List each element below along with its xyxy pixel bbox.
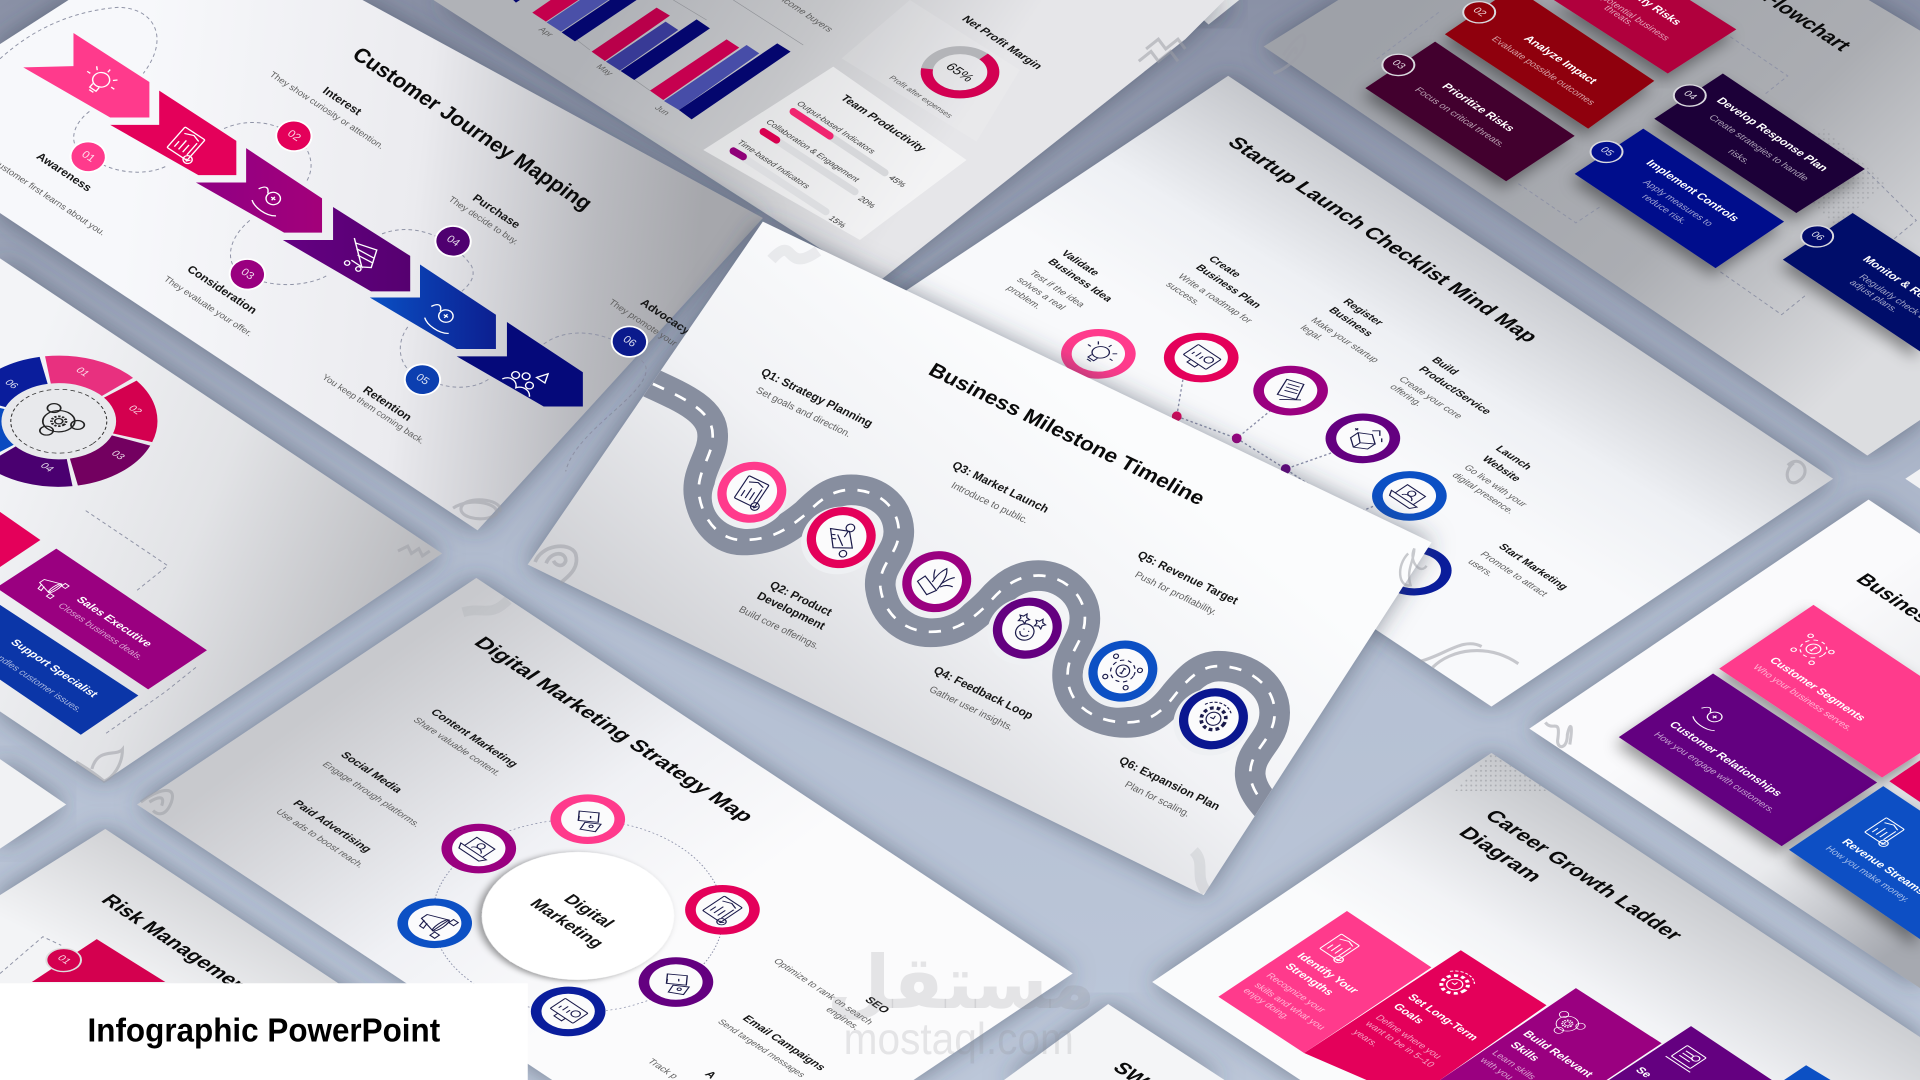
number badges: [63, 115, 654, 401]
donut cycle diagram: [0, 320, 211, 522]
card: customer relationships: [1619, 673, 1877, 846]
milestone Q5: [1068, 628, 1173, 720]
connector nodes: [1172, 411, 1291, 474]
donut chart: 65%: 65%: [942, 61, 978, 84]
step labels: Consideration: [184, 264, 259, 317]
donut numbers: 06: [2, 378, 21, 391]
panel: customer journey mapping slide: [0, 0, 763, 530]
step 1: pink: Recognize your: [1263, 972, 1329, 1015]
milestone Q6: [1159, 676, 1264, 767]
progress labels: Collaboration & Engagement: [764, 118, 863, 184]
step 2: crimson: [1304, 950, 1547, 1080]
step labels: You keep them coming back.: [320, 372, 427, 446]
node labels: Social Media: [337, 750, 405, 795]
card 02: [1445, 0, 1654, 129]
node labels: Business: [1326, 306, 1376, 339]
card 05: Implement Controls: [1643, 158, 1741, 224]
node 1: validate business idea: [1046, 319, 1151, 389]
node 5: launch website: [1357, 461, 1462, 531]
watermark: [827, 941, 1096, 1064]
donut numbers: [2, 366, 144, 474]
node labels: Start Marketing: [1495, 542, 1571, 592]
milestone labels: Set goals and direction.: [754, 385, 853, 440]
heading: Career Growth Ladder: [1480, 807, 1687, 944]
step labels: They promote your brand.: [607, 297, 703, 364]
number badges: [1376, 0, 1840, 251]
progress labels: Output-based Indicators: [794, 100, 878, 155]
progress bars: [733, 112, 885, 212]
milestone labels: Gather user insights.: [927, 684, 1015, 733]
milestone labels: Q5: Revenue Target: [1135, 549, 1241, 607]
node labels: Business Plan: [1193, 263, 1264, 310]
card 03: Prioritize Risks: [1439, 82, 1517, 134]
watermark: مستقل: [827, 941, 1096, 1026]
heading: Diagram: [1454, 824, 1546, 885]
step 2: crimson: Goals: [1390, 1002, 1426, 1026]
panel: business model canvas slide: [1529, 500, 1920, 988]
node 4: build product: [1310, 403, 1416, 473]
milestone Q1: [697, 449, 802, 541]
card 04: risks.: [1725, 147, 1753, 166]
step 1: pink: skills and what you: [1251, 981, 1328, 1032]
dashed connectors: [86, 511, 196, 735]
card: revenue streams: How you make money.: [1822, 844, 1912, 904]
card: customer segments: Customer Segments: [1766, 656, 1868, 723]
step labels: Advocacy: [638, 297, 693, 337]
node labels: users.: [1465, 558, 1496, 578]
heading: team productivity: Team Productivity: [837, 94, 929, 154]
number badges: 04: [1680, 89, 1699, 102]
number badges: 03: [238, 266, 256, 282]
milestone labels: Build core offerings.: [736, 605, 821, 652]
step 2: crimson: years.: [1350, 1028, 1381, 1049]
arrow 5: blue: [370, 264, 496, 349]
node labels: success.: [1163, 281, 1203, 307]
panel: risk flowchart slide: [1264, 0, 1920, 456]
node labels: Create your core: [1396, 375, 1465, 421]
donut numbers: 04: [37, 462, 56, 474]
number badges: 06: [620, 334, 638, 349]
panel: financial dashboard slide: [433, 0, 1224, 284]
card 03: [1365, 42, 1575, 181]
node labels: Create: [1206, 254, 1243, 280]
node labels: digital presence.: [1449, 471, 1517, 516]
card 05: reduce risk.: [1639, 193, 1689, 226]
number badges: 06: [1808, 230, 1827, 243]
node labels: Email Campaigns: [739, 1014, 828, 1073]
heading: Risk Management: [96, 891, 259, 999]
slide: small corner panel right: [1905, 469, 1920, 489]
milestone labels: Plan for scaling.: [1122, 780, 1192, 820]
node 6: start marketing: [1361, 536, 1467, 606]
step: blue: [1784, 1065, 1831, 1080]
card 06: [1783, 213, 1920, 351]
panel: risk management slide: [0, 829, 403, 1080]
step 3: magenta: Skills: [1507, 1040, 1542, 1063]
step 4: purple: [1609, 1026, 1772, 1080]
node labels: [273, 708, 892, 1080]
node labels: Share valuable content.: [410, 716, 503, 778]
node labels: Product/Service: [1416, 365, 1494, 417]
step labels: They show curiosity or attention.: [268, 70, 386, 151]
panel: organisation and cycle slide: [0, 258, 442, 781]
step labels: [0, 70, 703, 446]
caption box: [0, 983, 528, 1080]
node labels: Go live with your: [1461, 463, 1530, 509]
card 01: [1554, 0, 1736, 73]
milestone labels: Development: [754, 590, 828, 632]
node labels: solves a real: [1014, 276, 1068, 312]
node labels: legal.: [1297, 324, 1326, 342]
donut chart: 65%: [913, 41, 1007, 104]
node labels: Promote to attract: [1477, 550, 1550, 599]
node labels: Content Marketing: [428, 708, 520, 769]
dotted orbit: [372, 779, 784, 1053]
card 05: Apply measures to: [1640, 178, 1715, 228]
card 02: Analyze Impact: [1521, 34, 1599, 86]
step labels: Interest: [320, 85, 364, 118]
donut numbers: 01: [73, 366, 92, 379]
node: social media: [426, 813, 532, 884]
step 2: crimson: Set Long-Term: [1405, 992, 1480, 1043]
node labels: Paid Advertising: [290, 799, 374, 854]
progress labels: [735, 100, 909, 229]
milestone Q4: [973, 585, 1078, 677]
node labels: Build: [1429, 355, 1461, 377]
node 3: register business: [1238, 356, 1343, 426]
progress labels: 20%: [856, 195, 879, 210]
step 1: pink: Identify Your: [1294, 951, 1361, 996]
card: support specialist: Support Specialist: [8, 638, 100, 699]
arrow 3: magenta: [196, 148, 322, 233]
slide: small corner panel top: [1182, 0, 1239, 24]
step 3: magenta: [1440, 988, 1662, 1080]
number badges: 01: [79, 149, 97, 165]
panel: digital marketing strategy map slide: [137, 578, 1073, 1080]
milestone labels: [736, 366, 1241, 820]
card 04: Create strategies to handle: [1706, 113, 1811, 183]
step 3: magenta: Build Relevant: [1520, 1029, 1595, 1079]
milestone Q2: [787, 495, 892, 586]
node labels: Validate: [1058, 249, 1102, 278]
donut numbers: 03: [108, 449, 127, 462]
number badges: 03: [1389, 59, 1408, 71]
number badge: 01: [54, 954, 73, 966]
card 02: Evaluate possible outcomes: [1488, 35, 1597, 107]
node labels: engines.: [823, 1006, 862, 1032]
node labels: Optimize to rank on search: [770, 957, 875, 1027]
milestone labels: Q4: Feedback Loop: [931, 664, 1036, 722]
card 05: [1575, 129, 1784, 268]
step labels: They decide to buy.: [447, 194, 521, 246]
caption title: Infographic PowerPoint: [88, 1013, 440, 1050]
chart axis labels: [536, 0, 835, 117]
milestone labels: Q6: Expansion Plan: [1117, 754, 1222, 813]
step labels: Awareness: [34, 151, 94, 194]
watermark: mostaql.com: [844, 1015, 1074, 1064]
node labels: Make your startup: [1308, 316, 1381, 365]
milestone labels: Q1: Strategy Planning: [758, 366, 875, 430]
heading: Business Milestone Timeline: [924, 360, 1209, 510]
card: customer segments: [1719, 605, 1920, 778]
heading: Customer Journey Mapping: [348, 42, 598, 215]
step 1: pink: Strengths: [1282, 962, 1336, 997]
step labels: Retention: [360, 385, 414, 424]
node labels: Write a roadmap for: [1175, 272, 1255, 326]
heading: Startup Launch Checklist Mind Map: [1222, 134, 1542, 346]
number badges: 02: [1470, 6, 1489, 19]
arrow 1: pink: [23, 33, 149, 118]
centre hub: [442, 826, 714, 1006]
step 1: pink: enjoy doing.: [1240, 987, 1292, 1021]
node 2: create business plan: [1148, 322, 1254, 393]
card 04: [1654, 73, 1865, 213]
milestone Q3: [882, 539, 987, 630]
node labels: Register: [1340, 297, 1386, 328]
chart axis labels: May: [594, 63, 616, 77]
bar chart: [513, 0, 1020, 240]
card: pink: [0, 512, 40, 567]
progress labels: 15%: [826, 214, 849, 229]
milestone labels: Q2: Product: [767, 579, 835, 619]
card 06: adjust plans.: [1846, 278, 1901, 314]
centre hub: Digital: [559, 891, 618, 931]
node labels: Test if the idea: [1026, 269, 1088, 309]
step labels: They evaluate your offer.: [162, 274, 254, 338]
node labels: Business Idea: [1045, 257, 1116, 304]
arrow 2: crimson: [110, 91, 236, 175]
node labels: Launch: [1493, 444, 1534, 472]
card: support specialist: [0, 605, 138, 735]
node labels: problem.: [1004, 284, 1044, 311]
dashed connector loops: [0, 7, 646, 471]
winding road: [631, 373, 1280, 820]
milestone labels: Introduce to public.: [949, 480, 1030, 526]
node: paid advertising: [382, 888, 487, 958]
card: customer segments: Who your business serves.: [1750, 663, 1855, 733]
text: profit note: Profit after expenses: [887, 74, 955, 119]
slide: small corner panel left: [0, 759, 66, 849]
number badges: 04: [444, 233, 462, 249]
node: analytics: [515, 976, 621, 1047]
node: content marketing: [535, 784, 641, 854]
card: revenue streams: [1789, 786, 1920, 939]
card 03: Focus on critical threats.: [1412, 86, 1508, 149]
panel: career growth ladder slide: [1152, 753, 1920, 1080]
risk card: [32, 939, 165, 982]
milestone labels: Push for profitability.: [1132, 570, 1219, 618]
chart axis labels: Jun: [653, 104, 673, 117]
panel: startup launch checklist mind map slide: [887, 76, 1833, 707]
card: sales executive: [0, 549, 207, 689]
arrow 4: purple: [283, 207, 410, 291]
number badges: 05: [413, 372, 432, 387]
node labels: Use ads to boost reach.: [273, 808, 366, 870]
number badge: [39, 944, 88, 976]
step 1: pink: [1218, 911, 1431, 1053]
heading: Digital Marketing Strategy Map: [469, 634, 758, 826]
heading: net profit margin: Net Profit Margin: [959, 14, 1045, 71]
node labels: offering.: [1387, 383, 1425, 408]
card: sales executive: Sales Executive: [73, 595, 154, 649]
dashed connectors: [1374, 12, 1916, 315]
chart axis labels: Apr: [536, 25, 556, 38]
node labels: Engage through platforms.: [319, 760, 423, 829]
centre hub: Marketing: [526, 896, 608, 951]
node labels: [1004, 249, 1571, 599]
card 01: threats.: [1601, 4, 1637, 28]
card 04: Develop Response Plan: [1713, 96, 1830, 173]
node: email campaigns: [623, 947, 729, 1017]
panel: business milestone timeline slide: [528, 222, 1431, 895]
step 4: purple: Se: [1633, 1066, 1654, 1080]
milestone labels: Q3: Market Launch: [950, 459, 1051, 516]
card: crimson: [1889, 760, 1920, 802]
step labels: Purchase: [470, 193, 523, 231]
node labels: Website: [1479, 454, 1523, 484]
panel: swot slide: [1004, 1004, 1224, 1080]
progress labels: 45%: [886, 174, 909, 189]
card: sales executive: Closes business deals.: [55, 602, 146, 662]
step 2: crimson: want to be in 5–10: [1361, 1019, 1437, 1069]
number badges: 02: [285, 128, 303, 144]
node labels: Send targeted messages: [716, 1018, 808, 1079]
arrow 6: navy: [457, 322, 583, 407]
card: customer relationships: Customer Relationships: [1666, 720, 1784, 798]
node: seo: [670, 875, 775, 945]
mind map connectors: [1177, 380, 1378, 514]
donut numbers: 02: [125, 404, 144, 417]
number badges: 05: [1597, 146, 1616, 158]
card: customer relationships: How you engage with customers.: [1651, 731, 1778, 815]
node labels: SEO: [862, 995, 892, 1015]
step 2: crimson: Define where you: [1372, 1013, 1444, 1061]
progress labels: Time-based Indicators: [735, 138, 813, 190]
